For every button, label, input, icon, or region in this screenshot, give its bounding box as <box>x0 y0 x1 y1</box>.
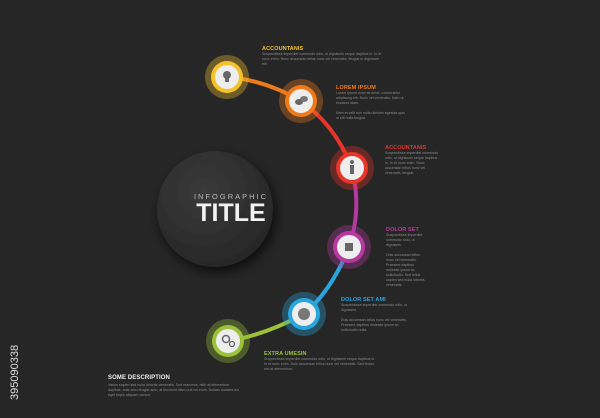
label 5: DOLOR SET AMI <box>341 297 386 303</box>
central circle <box>157 151 273 267</box>
label 1: ACCOUNTANIS <box>262 46 303 52</box>
node 1 yellow <box>205 55 249 99</box>
label 6: EXTRA UMESIN <box>264 351 307 357</box>
label 2: LOREM IPSUM <box>336 85 376 91</box>
description: SOME DESCRIPTION <box>108 375 170 381</box>
label 3: Suspendisse imperdiet commodo odio, ut dignissim neque dapibus in. In et nunc enim. Nunc accumsan tellus nunc vel venenatis, feugiat. <box>385 151 438 175</box>
label 6: Suspendisse imperdiet commodo odio, ut dignissim neque dapibus in. In et nunc enim. Duis accumsan tellus nunc vel venenatis. Sed lectus nisi at elementum. <box>264 357 375 371</box>
label 5: Suspendisse imperdiet commodo odio, ut dignissim. <box>341 303 407 312</box>
label 3: ACCOUNTANIS <box>385 145 426 151</box>
label 5 <box>341 297 407 332</box>
node 6 green <box>206 319 250 363</box>
node 4 purple <box>327 225 371 269</box>
label 2: Lorem ipsum dolor sit amet, consectetur adipiscing elit. Nunc vel venenatis. Nam ut tincidunt diam. <box>336 91 404 105</box>
label 1: Suspendisse imperdiet commodo odio, ut dignissim neque dapibus in. In et nunc enim. Nunc accumsan tellus nunc vel venenatis, feugiat ut dignissim elit. <box>262 52 381 66</box>
label 2: Nam et velit non nulla ultricies egestas quis ut elit nulla feugiat. <box>336 111 405 120</box>
label 1 <box>262 46 382 66</box>
description <box>108 374 239 397</box>
label 4: Suspendisse imperdiet commodo odio, ut dignissim. <box>386 233 422 247</box>
label 2 <box>336 85 405 120</box>
node 2 orange <box>279 79 323 123</box>
arc connectors <box>227 77 356 341</box>
title: TITLE <box>196 199 266 227</box>
title: INFOGRAPHIC <box>194 192 268 201</box>
label 4: Duis accumsan tellus nunc vel venenatis. Praesent dapibus molestie ipsum ac sollicitudin. Sed tellus sapien sed nulla lobortis venenatis. <box>386 253 425 287</box>
label 4 <box>386 227 425 287</box>
id text: 395090338 <box>9 345 21 400</box>
description: Varius sapien sed nulla lobortis venenatis. Sed maximus, nibh at elementum dapibus, ante arcu feugiat arcu, at tincidunt diam orci vel enim. Nullam sodales leo eget turpis aliquam cursus. <box>108 383 239 397</box>
node 3 red <box>330 146 374 190</box>
label 4: DOLOR SET <box>386 227 419 233</box>
label 5: Duis accumsan tellus nunc vel venenatis. Praesent dapibus molestie ipsum ac sollicitudin nulla. <box>341 318 407 332</box>
node 5 blue <box>282 292 326 336</box>
